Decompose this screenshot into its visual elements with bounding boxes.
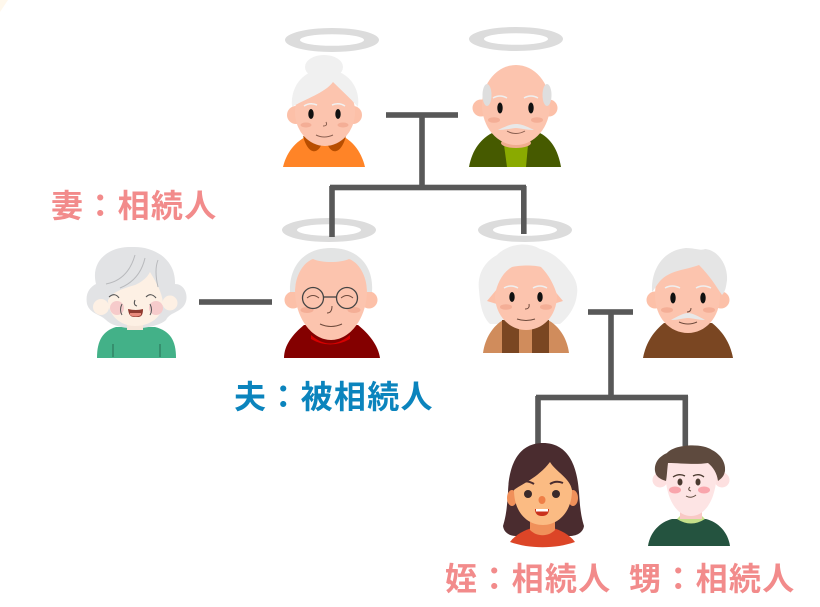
label: wife heir: 妻：相続人 — [51, 188, 218, 224]
person: paternal grandmother — [283, 55, 365, 167]
halo: husband — [282, 218, 376, 242]
halo: paternal grandmother — [285, 28, 379, 52]
halo: paternal grandfather — [469, 27, 563, 51]
person: wife — [87, 247, 187, 358]
person: brother-in-law — [643, 248, 733, 358]
label: husband decedent: 夫：被相続人 — [234, 379, 434, 415]
label: niece heir: 姪：相続人 — [445, 561, 612, 597]
family tree connector lines — [199, 112, 688, 446]
person: nephew — [648, 445, 730, 546]
person: sister, deceased — [479, 245, 577, 353]
person: husband, deceased — [284, 248, 380, 358]
person: paternal grandfather — [469, 65, 561, 167]
label: nephew heir: 甥：相続人 — [629, 561, 796, 597]
person: niece — [503, 443, 584, 547]
halo: sister — [478, 218, 572, 242]
